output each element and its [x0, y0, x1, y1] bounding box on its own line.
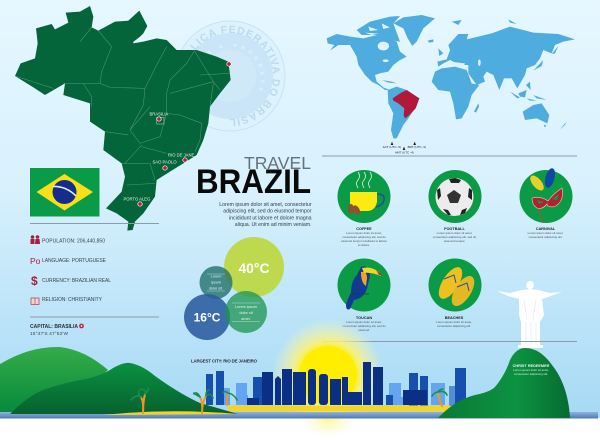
- label: beaches: [436, 316, 472, 328]
- label: carnival: Lorem ipsum dolor sit amet,: [528, 231, 564, 235]
- Christ Redeemer caption: Lorem ipsum dolor sit amet,: [513, 368, 549, 372]
- seal stamp: REPUBLICA FEDERATIVA DO BRASIL: [188, 26, 280, 126]
- temperature bubbles: Lorem: [211, 274, 221, 278]
- icon: flip flops: [428, 258, 482, 312]
- icon: football: [428, 170, 482, 223]
- label: coffee: et dolore.: [358, 243, 370, 247]
- beach: [103, 411, 238, 415]
- temperature bubbles: 40°C: [238, 260, 270, 276]
- facts list: [30, 235, 111, 304]
- label: coffee: Lorem ipsum dolor sit amet,: [346, 231, 382, 235]
- title: BRAZIL: [196, 163, 311, 201]
- icon: religion: [31, 298, 39, 304]
- icon: toucan: [338, 258, 390, 312]
- world map: ACT (UTC -5): [383, 145, 401, 149]
- hill: front left: [10, 363, 238, 414]
- facts list: CURRENCY: BRAZILIAN REAL: [42, 278, 111, 284]
- world map: [327, 15, 575, 154]
- statue: Christ the Redeemer: [497, 281, 562, 348]
- skyline: Rio de Janeiro: [206, 362, 466, 412]
- hill: Corcovado: [438, 348, 570, 418]
- facts list: RELIGION: CHRISTIANITY: [42, 297, 103, 303]
- sea: [0, 412, 598, 418]
- capital: CAPITAL: BRASILIA: [30, 324, 78, 330]
- facts list: POPULATION: 206,440,850: [42, 238, 105, 244]
- label: coffee: consectetur adipiscing elit, sed do: [342, 235, 386, 239]
- temperature bubbles: dolor sit: [239, 311, 254, 315]
- icon: carnival mask: [520, 167, 572, 223]
- flag of Brazil: [30, 168, 100, 216]
- label: football: consectetur adipiscing elit, sed do: [433, 235, 477, 239]
- intro text: [219, 202, 312, 228]
- Christ Redeemer caption: [513, 364, 550, 376]
- label: football: Lorem ipsum dolor sit amet,: [437, 231, 473, 235]
- temperature bubbles: [184, 237, 284, 340]
- label: beaches: Lorem ipsum dolor sit amet,: [436, 320, 472, 324]
- palm trees: [131, 388, 447, 413]
- label: carnival: consectetur adipiscing elit.: [529, 235, 563, 239]
- temperature bubbles: Lorem ipsum: [235, 305, 257, 309]
- intro text: aliqua. Ut enim ad minim veniam.: [235, 222, 312, 228]
- title: TRAVEL: [244, 153, 311, 173]
- label: coffee: [341, 227, 387, 247]
- icon: coffee: [338, 170, 390, 223]
- label: toucan: eiusmod.: [358, 328, 370, 332]
- world map: AMT (UTC -4): [395, 150, 414, 154]
- label: toucan: Lorem ipsum dolor sit amet,: [346, 320, 382, 324]
- label: carnival: CARNIVAL: [536, 227, 556, 231]
- intro text: incididunt ut labore et dolore magna: [229, 215, 312, 221]
- map labels and pins: BRASILIA: [150, 112, 169, 116]
- label: football: eiusmod tempor.: [444, 239, 465, 243]
- intro text: Lorem ipsum dolor sit amet, consectetur: [219, 202, 312, 208]
- intro text: adipiscing elit, sed do eiusmod tempor: [223, 209, 312, 215]
- temperature bubbles: ipsum: [211, 280, 221, 284]
- Christ Redeemer caption: consectetur adipiscing elit.: [514, 372, 548, 376]
- label: football: [433, 227, 477, 243]
- hill: back left: [0, 347, 108, 412]
- label: toucan: TOUCAN: [356, 316, 372, 320]
- label: toucan: [342, 316, 386, 332]
- facts list: LANGUAGE: PORTUGUESE: [42, 258, 107, 264]
- temperature bubbles: 16°C: [194, 310, 221, 324]
- map labels and pins: RIO DE JANE: [168, 152, 194, 158]
- map labels and pins: PORTO ALEG: [124, 196, 150, 202]
- label: coffee: COFFEE: [356, 227, 372, 231]
- capital: [30, 324, 84, 337]
- temperature bubbles: dolor sit.: [209, 286, 223, 290]
- map: Brazil: [15, 6, 231, 231]
- label: carnival: [528, 227, 564, 239]
- icon: currency: $: [31, 274, 38, 288]
- label: football: FOOTBALL: [444, 227, 466, 231]
- sun: [272, 319, 384, 431]
- Christ Redeemer caption: CHRIST REDEEMER: [513, 364, 550, 368]
- icon: population: [30, 235, 40, 244]
- map labels and pins: [124, 62, 231, 206]
- label: coffee: eiusmod tempor incididunt ut labore: [341, 239, 387, 243]
- city label: LARGEST CITY: RIO DE JANEIRO: [191, 358, 258, 364]
- capital: 15°47'S 47°52'W: [30, 331, 68, 337]
- label: beaches: consectetur adipiscing elit.: [437, 324, 471, 328]
- label: toucan: consectetur adipiscing elit, sed do: [342, 324, 386, 328]
- temperature bubbles: amet.: [241, 317, 251, 321]
- world map: BRT (UTC -3): [408, 145, 426, 149]
- icon: language: Po: [30, 256, 41, 266]
- label: beaches: BEACHES: [445, 316, 464, 320]
- map labels and pins: SAO PAOLO: [152, 160, 177, 164]
- sun reflection: [300, 398, 356, 438]
